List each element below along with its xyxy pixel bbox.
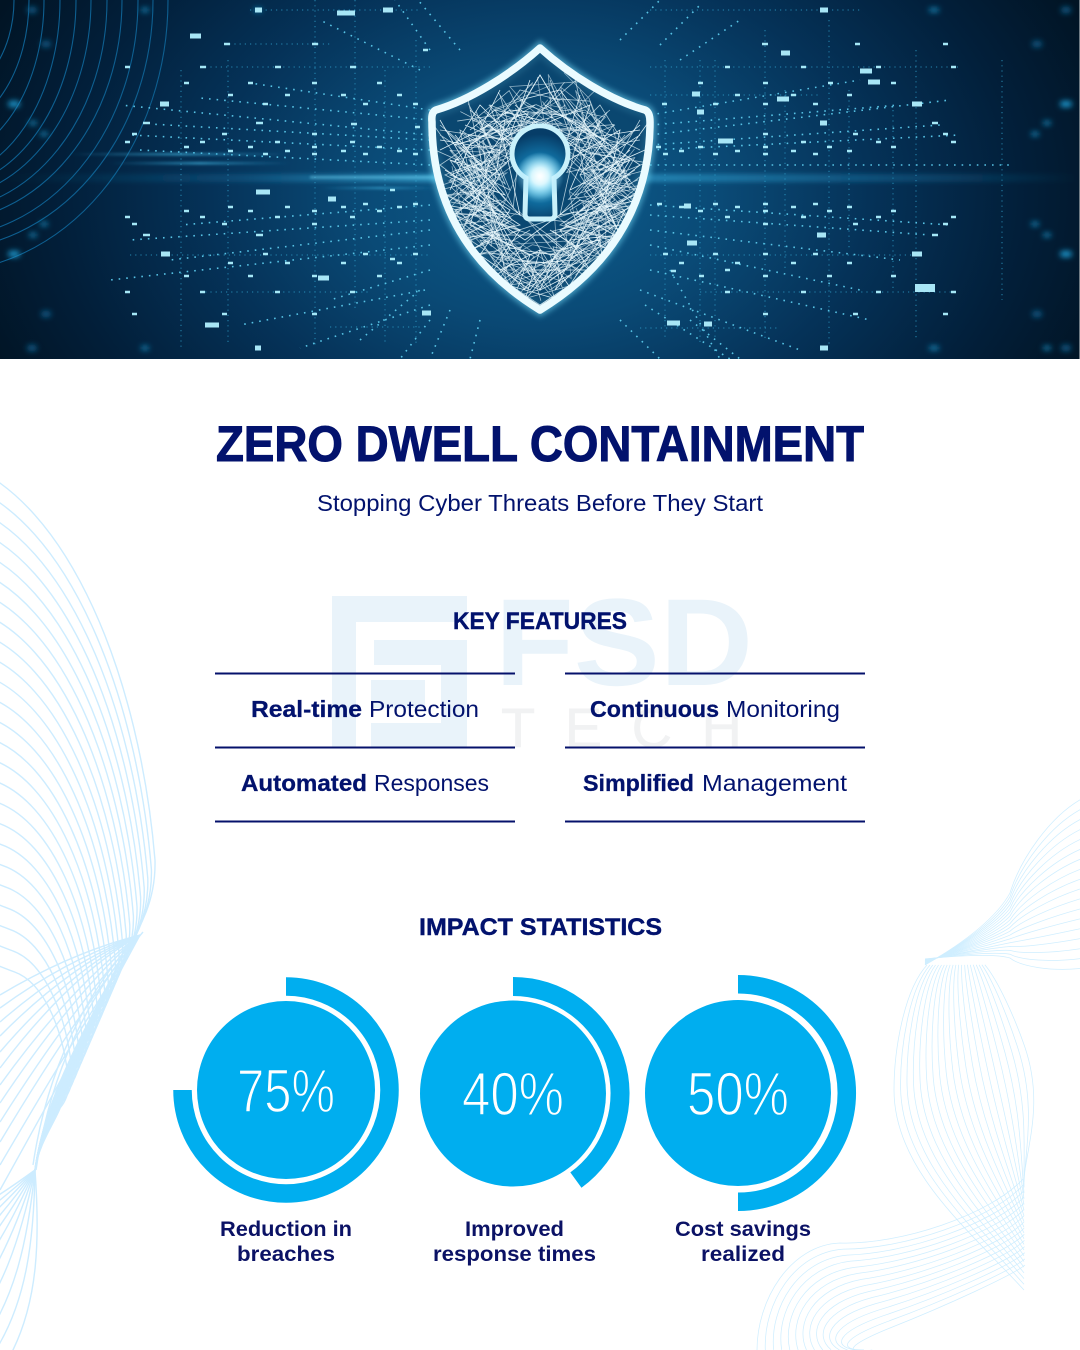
label: improved response times: Improved [465, 1217, 564, 1241]
subtitle: Stopping Cyber Threats Before They Start [317, 490, 764, 516]
label: reduction in breaches [220, 1217, 352, 1266]
watermark wordmark TECH: TECH [501, 696, 742, 759]
progress arc 40% [513, 986, 620, 1180]
stat: 50% cost savings realized [645, 984, 847, 1266]
horizontal light streaks [0, 153, 1080, 189]
feature: continuous monitoring: Monitoring [726, 696, 840, 722]
data bits [125, 10, 956, 348]
decorative wave lines: left [0, 370, 155, 1350]
feature: simplified management [583, 770, 848, 796]
label: improved response times: response times [433, 1242, 596, 1266]
disc 40% [420, 1000, 606, 1186]
feature: simplified management: Simplified [583, 770, 694, 796]
disc 75% [197, 1001, 375, 1179]
blurred data points near the edges [11, 10, 1069, 348]
watermark logo mark [332, 596, 467, 748]
label: improved response times [433, 1217, 596, 1266]
progress arc 50% [738, 984, 847, 1202]
hero image: cyber security shield over data grid [0, 0, 1080, 359]
network mesh inside shield [436, 53, 646, 306]
feature: real-time protection [251, 696, 479, 722]
keyhole [512, 126, 568, 219]
heading: key features: KEY FEATURES [453, 608, 627, 635]
label: cost savings realized: realized [701, 1242, 785, 1266]
panel: key features table [215, 674, 865, 822]
feature: continuous monitoring: Continuous [590, 696, 719, 722]
label: reduction in breaches: Reduction in [220, 1217, 352, 1241]
heading: impact statistics: IMPACT STATISTICS [419, 914, 662, 941]
progress arc 75% [182, 986, 390, 1194]
stat: 75% reduction in breaches [182, 986, 390, 1266]
watermark wordmark FSD: FSD [495, 574, 753, 712]
feature: automated responses [241, 770, 489, 796]
value 40%: 40% [462, 1060, 564, 1128]
label: cost savings realized: Cost savings [675, 1217, 811, 1241]
value 75%: 75% [237, 1057, 335, 1125]
decorative wave lines: right [757, 797, 1080, 1350]
value 50%: 50% [687, 1060, 789, 1128]
feature: automated responses: Responses [374, 770, 489, 796]
feature: real-time protection: Real-time [251, 696, 362, 722]
label: reduction in breaches: breaches [237, 1242, 335, 1266]
feature: continuous monitoring [590, 696, 840, 722]
shield outline [432, 48, 650, 310]
title: ZERO DWELL CONTAINMENT [216, 416, 864, 472]
disc 50% [645, 1000, 831, 1186]
label: cost savings realized [675, 1217, 811, 1266]
icon: shield with keyhole [422, 38, 660, 320]
feature: real-time protection: Protection [369, 696, 479, 722]
watermark: FSD Tech logo [332, 574, 753, 759]
stat: 40% improved response times [420, 986, 620, 1266]
feature: simplified management: Management [702, 770, 848, 796]
feature: automated responses: Automated [241, 770, 367, 796]
